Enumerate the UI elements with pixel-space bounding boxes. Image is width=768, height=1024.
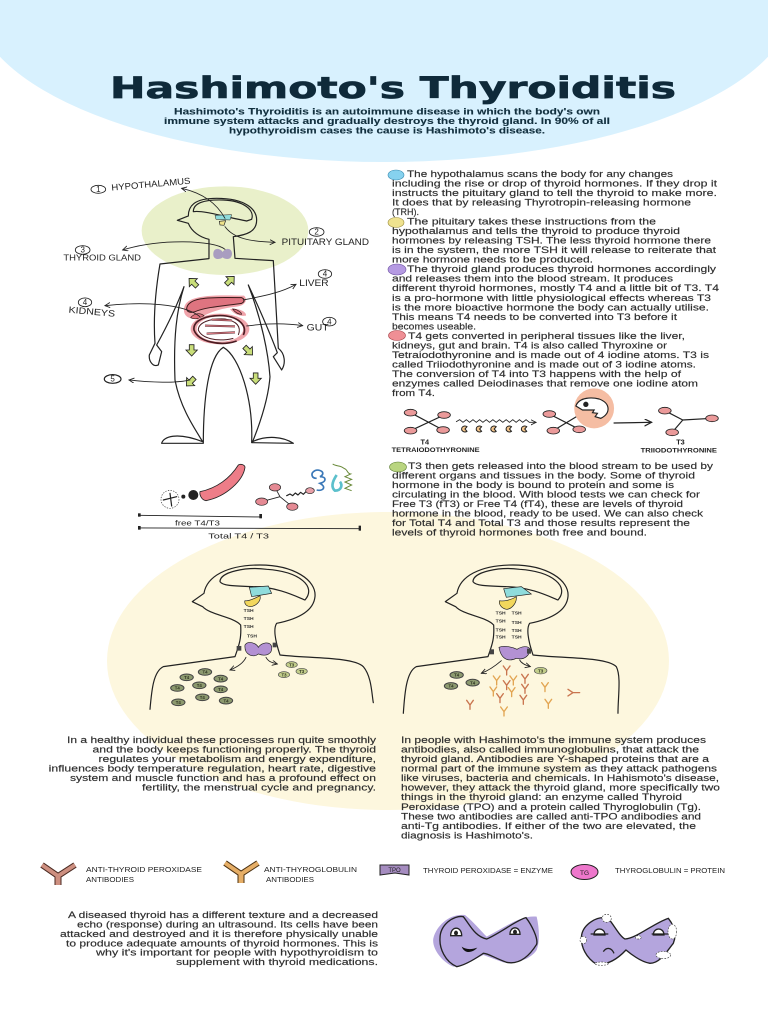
Hashimoto's description text: things in the thyroid gland: an enzyme called Thyroid: [401, 792, 682, 803]
numbered explanation text: The conversion of T4 into T3 happens with the help of: [392, 369, 681, 380]
numbered explanation text: T4 gets converted in peripheral tissues like the liver,: [408, 331, 685, 342]
TSH signals: [496, 611, 522, 641]
numbered explanation text: It does that by releasing Thyrotropin-releasing hormone: [392, 198, 691, 209]
thyroid gland label: THYROID GLAND: [63, 253, 141, 263]
kidneys: [191, 309, 246, 319]
brain: [220, 569, 309, 600]
T4 to T3 conversion diagram: [392, 388, 718, 455]
Hashimoto's description text: thyroid gland. Antibodies are Y-shaped proteins that are a: [401, 754, 710, 765]
healthy description text: regulates your metabolism and energy expenditure,: [98, 754, 376, 765]
antibodies: [467, 666, 580, 716]
diseased thyroid text: to produce adequate amounts of thyroid hormones. This is: [66, 938, 378, 949]
numbered explanation text: hormones by releasing TSH. The less thyroid hormone there: [392, 236, 711, 247]
T3 hormones: T3: [289, 662, 295, 667]
head and shoulders outline: [150, 565, 373, 709]
diseased thyroid text: [60, 910, 378, 968]
numbered explanation text: The hypothalamus scans the body for any changes: [407, 169, 673, 180]
T4 molecule: T4: [421, 437, 430, 446]
anti-Tg antibody icon: [225, 863, 258, 883]
anti-TPO antibody icon: [42, 865, 75, 885]
pituitary gland label: 2: [314, 228, 319, 237]
Hashimoto's thyroid figure: [403, 565, 619, 716]
step 5 text: different organs and tissues in the body. Some of thyroid: [392, 470, 695, 482]
anti-Tg label: [264, 865, 357, 884]
T4 hormones: T4: [470, 680, 476, 685]
anti-Tg label: ANTI-THYROGLOBULIN: [264, 865, 357, 874]
T4 hormones: [444, 672, 479, 689]
head and shoulders outline: [403, 565, 619, 713]
bound hormone molecule: [256, 484, 314, 510]
diseased thyroid character: [580, 914, 677, 965]
marker 1: [388, 170, 404, 180]
Hashimoto's description text: antibodies, also called immunoglobulins, that attack the: [401, 744, 699, 756]
intro text: immune system attacks and gradually destroys the thyroid gland. In 90% of all: [164, 116, 610, 126]
marker 5: [390, 462, 406, 472]
molecule being cut: [543, 410, 587, 434]
numbered explanation text: including the rise or drop of thyroid hormones. If they drop it: [392, 178, 717, 190]
TSH signals: TSH: [496, 619, 506, 625]
pituitary: [245, 596, 260, 607]
numbered explanation text: enzymes called Deiodinases that remove one iodine atom: [392, 378, 698, 390]
organs: [184, 295, 249, 344]
T4 hormones: T4: [218, 687, 224, 692]
anti-TPO label: [86, 865, 202, 884]
TSH signals: TSH: [496, 611, 506, 617]
T4 hormones: T4: [176, 700, 181, 705]
step 5 label: [104, 375, 121, 384]
pituitary gland: [219, 221, 226, 225]
Hashimoto's description text: [401, 735, 720, 841]
anti-Tg label: ANTIBODIES: [266, 875, 314, 884]
T4 hormones: T4: [223, 698, 229, 703]
Hashimoto's description text: normal part of the immune system as they attack pathogens: [401, 764, 717, 775]
legend: [42, 863, 725, 885]
step 5 text: [390, 461, 713, 539]
header background ellipse: [0, 0, 768, 162]
numbered explanation text: (TRH).: [392, 207, 419, 218]
green head highlight: [142, 186, 308, 275]
numbered explanation text: becomes useable.: [392, 321, 476, 332]
pituitary: [499, 597, 516, 609]
title: Hashimoto's Thyroiditis: [110, 71, 676, 105]
T4 molecule: [392, 409, 480, 454]
hypothalamus: [249, 586, 272, 597]
healthy description text: and the body keeps functioning properly. The thyroid: [92, 744, 376, 756]
free vs total hormone diagram: [138, 464, 361, 541]
T4 hormones: T4: [218, 676, 224, 681]
blood vessel: [200, 464, 245, 501]
T3 molecule: TRIIODOTHYRONINE: [641, 449, 717, 455]
output arrows: [481, 649, 531, 673]
Tg protein icon: TG: [580, 870, 589, 877]
marker 4: [388, 330, 406, 340]
hypothalamus: [215, 215, 232, 220]
Hashimoto's description text: Peroxidase (TPO) and a protein called Thyroglobulin (Tg).: [401, 802, 701, 813]
anti-TPO label: ANTIBODIES: [86, 875, 134, 884]
total T4/T3 bracket: Total T4 / T3: [208, 532, 269, 541]
hypothalamus label: HYPOTHALAMUS: [111, 176, 191, 193]
numbered explanation text: is in the system, the more TSH it will release to reiterate that: [392, 245, 716, 256]
liver label: LIVER: [299, 278, 329, 288]
numbered explanation text: The thyroid gland produces thyroid hormones accordingly: [407, 264, 716, 275]
Hashimoto's description text: These two antibodies are called anti-TPO andibodies and: [401, 811, 701, 822]
body outline: [149, 198, 293, 443]
diseased thyroid text: attacked and destroyed and it is therefore physically unable: [60, 929, 378, 940]
step 5 text: hormone in the blood, ready to be used. We can also check: [392, 509, 703, 520]
TSH signals: TSH: [247, 634, 257, 640]
T3 hormone: T3: [538, 668, 544, 673]
numbered explanation text: different thyroid hormones, mostly T4 and a little bit of T3. T4: [392, 283, 720, 294]
numbered explanation text: and releases them into the blood stream. It produces: [392, 274, 673, 285]
body diagram: [142, 186, 308, 443]
pituitary gland label: [282, 228, 370, 247]
numbered explanation text: is a pro-hormone with little physiological effects whereas T3: [392, 293, 711, 304]
TSH signals: TSH: [512, 628, 522, 634]
hypothalamus label: [91, 176, 191, 194]
step 5 text: levels of thyroid hormones both free and bound.: [392, 528, 647, 539]
liver: [184, 295, 246, 319]
diseased thyroid text: echo (response) during an ultrasound. Its cells have been: [77, 920, 378, 930]
Hashimoto's description text: In people with Hashimoto's the immune system produces: [401, 735, 706, 746]
numbered explanation text: more hormone needs to be produced.: [392, 255, 593, 266]
pituitary gland label: PITUITARY GLAND: [282, 237, 370, 247]
numbered explanation text: Tetraiodothyronine and is made out of 4 iodine atoms. T3 is: [392, 350, 709, 361]
TSH signals: TSH: [496, 627, 506, 633]
numbered explanation text: kidneys, gut and brain. T4 is also called Thyroxine or: [392, 340, 668, 351]
TSH signals: TSH: [496, 635, 506, 641]
Hashimoto's description text: diagnosis is Hashimoto's.: [401, 830, 533, 841]
TSH signals: TSH: [244, 608, 254, 614]
intro text: [164, 106, 610, 136]
free T4/T3 bracket: free T4/T3: [175, 518, 220, 527]
T3 molecule: T3: [676, 437, 685, 446]
lower background ellipse: [107, 512, 669, 810]
healthy description text: fertility, the menstrual cycle and pregnancy.: [142, 783, 376, 794]
wavy chain and enzymes: [456, 420, 536, 432]
step 5 text: for Total T4 and Total T3 and those results represent the: [392, 518, 690, 529]
step 5 label: 5: [110, 375, 115, 384]
gut label: 4: [327, 317, 332, 326]
hypothalamus: [504, 587, 531, 597]
TSH signals: TSH: [512, 635, 522, 641]
free T4/T3 bracket: [138, 513, 262, 527]
T3 molecule: [641, 407, 718, 455]
TSH signals: [244, 608, 257, 640]
marker 2: [388, 218, 404, 228]
step 5 text: circulating in the blood. With blood tests we can check for: [392, 490, 701, 501]
binding protein coils: [312, 464, 352, 491]
diseased thyroid text: why it's important for people with hypothyroidism to: [95, 948, 378, 959]
numbered explanation text: called Triiodothyronine and is made out of 3 iodine atoms.: [392, 359, 696, 370]
TPO enzyme icon: TPO: [388, 868, 401, 874]
healthy description text: system and muscle function and has a profound effect on: [70, 773, 376, 784]
thyroid: [245, 642, 272, 656]
T4 hormones: T4: [454, 673, 460, 678]
healthy description text: [49, 735, 376, 794]
deiodinase pacman enzyme: [574, 388, 614, 428]
Tg protein icon: [571, 864, 598, 880]
TSH signals: TSH: [244, 616, 254, 622]
T4 hormones: T4: [200, 695, 205, 700]
T4 molecule: TETRAIODOTHYRONINE: [392, 448, 480, 454]
vessel hormones: [161, 490, 198, 508]
thyroid: [213, 249, 232, 259]
T4 hormones: T4: [175, 686, 180, 691]
liver label: [299, 270, 332, 288]
kidneys label: KIDNEYS: [68, 305, 116, 319]
kidneys label: 4: [83, 298, 88, 307]
TPO enzyme icon: [380, 865, 409, 875]
numbered explanation text: [388, 169, 720, 399]
diseased thyroid text: supplement with thyroid medications.: [176, 957, 378, 968]
TSH signals: TSH: [512, 611, 522, 617]
body arrows and labels: [63, 176, 370, 390]
T3 hormones: T3: [281, 672, 287, 677]
Hashimoto's description text: like viruses, bacteria and chemicals. In Hahismoto's disease,: [401, 773, 719, 784]
thyroid gland label: [63, 246, 141, 263]
output arrows: [230, 643, 277, 670]
numbered explanation text: from T4.: [392, 388, 435, 399]
anti-TPO label: ANTI-THYROID PEROXIDASE: [86, 865, 202, 874]
brain: [473, 569, 562, 600]
pointer arrows: [105, 188, 303, 382]
healthy description text: In a healthy individual these processes run quite smoothly: [67, 735, 376, 746]
Hashimoto's description text: anti-Tg antibodies. If either of the two are elevated, the: [401, 821, 696, 832]
numbered explanation text: hypothalamus and tells the thyroid to produce thyroid: [392, 226, 680, 237]
T4 hormones: T4: [197, 683, 202, 688]
TPO label: THYROID PEROXIDASE = ENZYME: [423, 866, 553, 875]
step 5 text: hormone in the body is bound to protein and some is: [392, 480, 674, 491]
numbered explanation text: This means T4 needs to be converted into T3 before it: [392, 312, 677, 323]
kidneys label: [68, 298, 116, 319]
numbered explanation text: The pituitary takes these instructions from the: [407, 217, 656, 228]
T4 hormones: T4: [448, 684, 454, 689]
numbered explanation text: instructs the pituitary gland to tell the thyroid to make more.: [392, 188, 717, 199]
Tg label: THYROGLOBULIN = PROTEIN: [615, 866, 725, 875]
healthy thyroid figure: [150, 565, 373, 709]
hypothalamus label: 1: [96, 185, 101, 194]
T3 hormones: T3: [299, 669, 305, 674]
T4 hormones: T4: [184, 675, 190, 680]
marker 3: [388, 264, 406, 275]
intro text: hypothyroidism cases the cause is Hashimoto's disease.: [229, 126, 545, 136]
intro text: Hashimoto's Thyroiditis is an autoimmune disease in which the body's own: [174, 106, 600, 116]
thyroid gland label: 3: [80, 246, 85, 255]
T4 hormones: T4: [202, 670, 208, 675]
gut: [191, 314, 249, 344]
T3 hormone: [534, 667, 547, 674]
T3 hormones: [278, 662, 307, 678]
gut label: [307, 317, 336, 333]
conversion arrow: [614, 421, 652, 425]
step 5 text: T3 then gets released into the blood stream to be used by: [408, 461, 713, 472]
green arrows: [182, 272, 261, 390]
TSH signals: TSH: [512, 620, 522, 626]
Hashimoto's description text: however, they attack the thyroid gland, more specifically two: [401, 783, 720, 794]
thyroid: [499, 646, 530, 660]
step 5 text: Free T3 (fT3) or Free T4 (fT4), these are levels of thyroid: [392, 499, 683, 510]
liver label: 4: [323, 270, 328, 279]
T4 hormones: [171, 669, 233, 706]
healthy thyroid character: [433, 915, 539, 967]
healthy description text: influences body temperature regulation, heart rate, digestive: [49, 764, 376, 775]
TSH signals: TSH: [244, 624, 254, 630]
numbered explanation text: is the more bioactive hormone the body can actually utilise.: [392, 302, 709, 313]
diseased thyroid text: A diseased thyroid has a different texture and a decreased: [68, 910, 378, 921]
gut label: GUT: [307, 323, 329, 333]
